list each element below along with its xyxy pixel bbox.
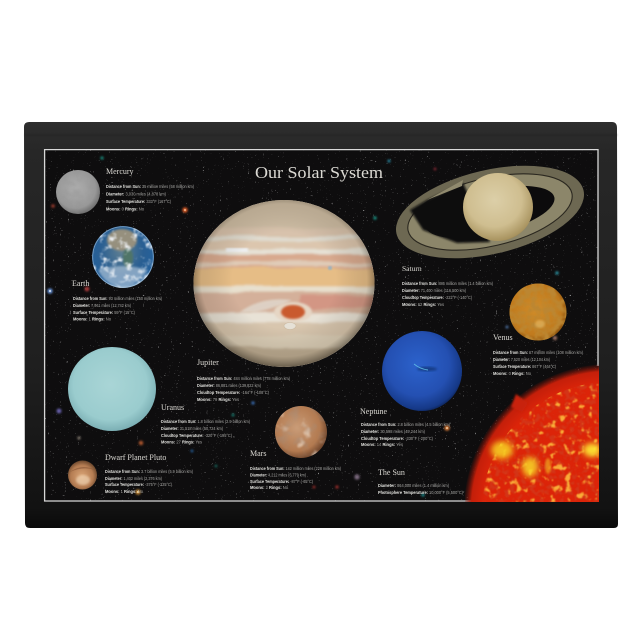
text: The Sun	[378, 468, 463, 496]
text: The Sun: Diameter: 864,000 miles (1.4 million km)	[378, 483, 449, 489]
text: Uranus: Uranus	[161, 403, 184, 412]
planet: Uranus	[68, 347, 156, 431]
text: Neptune: Moons: 14 Rings: Yes	[361, 442, 403, 448]
text: Neptune	[360, 407, 450, 448]
text: Mars: Mars	[250, 449, 266, 458]
the Sun	[465, 364, 599, 502]
text: Mars: Moons: 2 Rings: No	[250, 485, 288, 491]
text: Jupiter: Diameter: 86,881 miles (139,822 km)	[197, 383, 261, 389]
text: Saturn: Distance from Sun: 886 million miles (1.4 billion km)	[402, 281, 493, 287]
title: Our Solar System	[255, 163, 383, 182]
text: Saturn: Diameter: 71,400 miles (116,500 km)	[402, 288, 466, 294]
text: Earth: Moons: 1 Rings: No	[73, 316, 111, 322]
text: The Sun: The Sun	[378, 468, 405, 477]
text: Neptune: Distance from Sun: 2.8 billion miles (4.5 billion km)	[361, 422, 450, 428]
text: Mercury: Diameter: 3,030 miles (4,878 km)	[106, 192, 166, 198]
text: Uranus: Moons: 27 Rings: Yes	[161, 440, 202, 446]
text: Dwarf Planet Pluto: Moons: 1 Rings: No	[105, 489, 143, 495]
coloured stars	[47, 156, 559, 496]
planet: Neptune	[382, 331, 462, 411]
text: Venus: Venus	[493, 333, 513, 342]
text: Venus: Distance from Sun: 67 million miles (108 million km)	[493, 350, 583, 356]
text: Neptune: Diameter: 30,598 miles (49,244 km)	[361, 429, 425, 435]
text: Saturn: Saturn	[402, 264, 422, 273]
text: Earth	[72, 279, 162, 322]
text: Dwarf Planet Pluto: Distance from Sun: 3.7 billion miles (5.9 billion km)	[105, 469, 193, 475]
text: Jupiter	[197, 358, 290, 403]
planet: Jupiter	[194, 200, 374, 367]
text: Earth: Surface Temperature: 59°F (15°C)	[73, 310, 135, 316]
text: Mars: Distance from Sun: 142 million miles (228 million km)	[250, 466, 341, 472]
text: Uranus: Diameter: 31,518 miles (50,724 km)	[161, 426, 223, 432]
text: Mars	[250, 449, 341, 491]
text: Dwarf Planet Pluto	[105, 453, 193, 495]
text: Dwarf Planet Pluto: Diameter: 1,402 miles (2,376 km)	[105, 476, 162, 482]
text: Earth: Earth	[72, 279, 89, 288]
text: Saturn: Cloudtop Temperature: -222°F (-140°C)	[402, 295, 472, 301]
text: Mercury: Distance from Sun: 35 million miles (58 million km)	[106, 184, 194, 190]
text: Jupiter: Cloudtop Temperature: -164°F (-108°C)	[197, 390, 269, 396]
text: Venus: Diameter: 7,520 miles (12,104 km)	[493, 357, 550, 363]
text: Neptune: Neptune	[360, 407, 388, 416]
text: Jupiter: Distance from Sun: 484 million miles (778 million km)	[197, 376, 290, 382]
text: Mercury	[106, 167, 194, 212]
star field panel	[44, 149, 598, 501]
text: Uranus: Cloudtop Temperature: -320°F (-195°C)	[161, 433, 232, 439]
planet: Mars	[275, 406, 327, 458]
text: Jupiter: Jupiter	[197, 358, 219, 367]
text: Dwarf Planet Pluto: Surface Temperature: -375°F (-225°C)	[105, 482, 172, 488]
text: Mercury: Moons: 0 Rings: No	[106, 206, 144, 212]
text: Jupiter: Moons: 79 Rings: Yes	[197, 397, 239, 403]
planet: Mercury	[56, 170, 100, 214]
text: Venus: Surface Temperature: 867°F (464°C)	[493, 364, 556, 370]
text: Saturn: Moons: 62 Rings: Yes	[402, 302, 444, 308]
text: Mercury: Mercury	[106, 167, 134, 176]
planet: Venus	[509, 283, 567, 341]
text: Uranus	[161, 403, 250, 446]
text: Venus	[493, 333, 583, 377]
white frame border	[45, 150, 598, 501]
text: Mars: Diameter: 4,212 miles (6,779 km)	[250, 472, 306, 478]
text: Venus: Moons: 0 Rings: No	[493, 371, 531, 377]
text: Earth: Diameter: 7,961 miles (12,742 km)	[73, 303, 131, 309]
planet: Pluto	[68, 460, 97, 490]
placemat background	[24, 122, 618, 528]
text: Uranus: Distance from Sun: 1.8 billion miles (2.9 billion km)	[161, 419, 250, 425]
text: The Sun: Photosphere Temperature: 10,000°F (5,500°C)	[378, 490, 463, 496]
text: Mars: Surface Temperature: -87°F (-65°C)	[250, 479, 313, 485]
text: Dwarf Planet Pluto: Dwarf Planet Pluto	[105, 453, 166, 462]
text: Saturn	[402, 264, 493, 308]
planet: Saturn with rings	[387, 149, 593, 275]
planet: Earth	[92, 226, 154, 288]
text: Earth: Distance from Sun: 93 million miles (150 million km)	[73, 296, 162, 302]
text: Neptune: Cloudtop Temperature: -330°F (-200°C)	[361, 436, 433, 442]
text: Mercury: Surface Temperature: 333°F (167°C)	[106, 199, 171, 205]
